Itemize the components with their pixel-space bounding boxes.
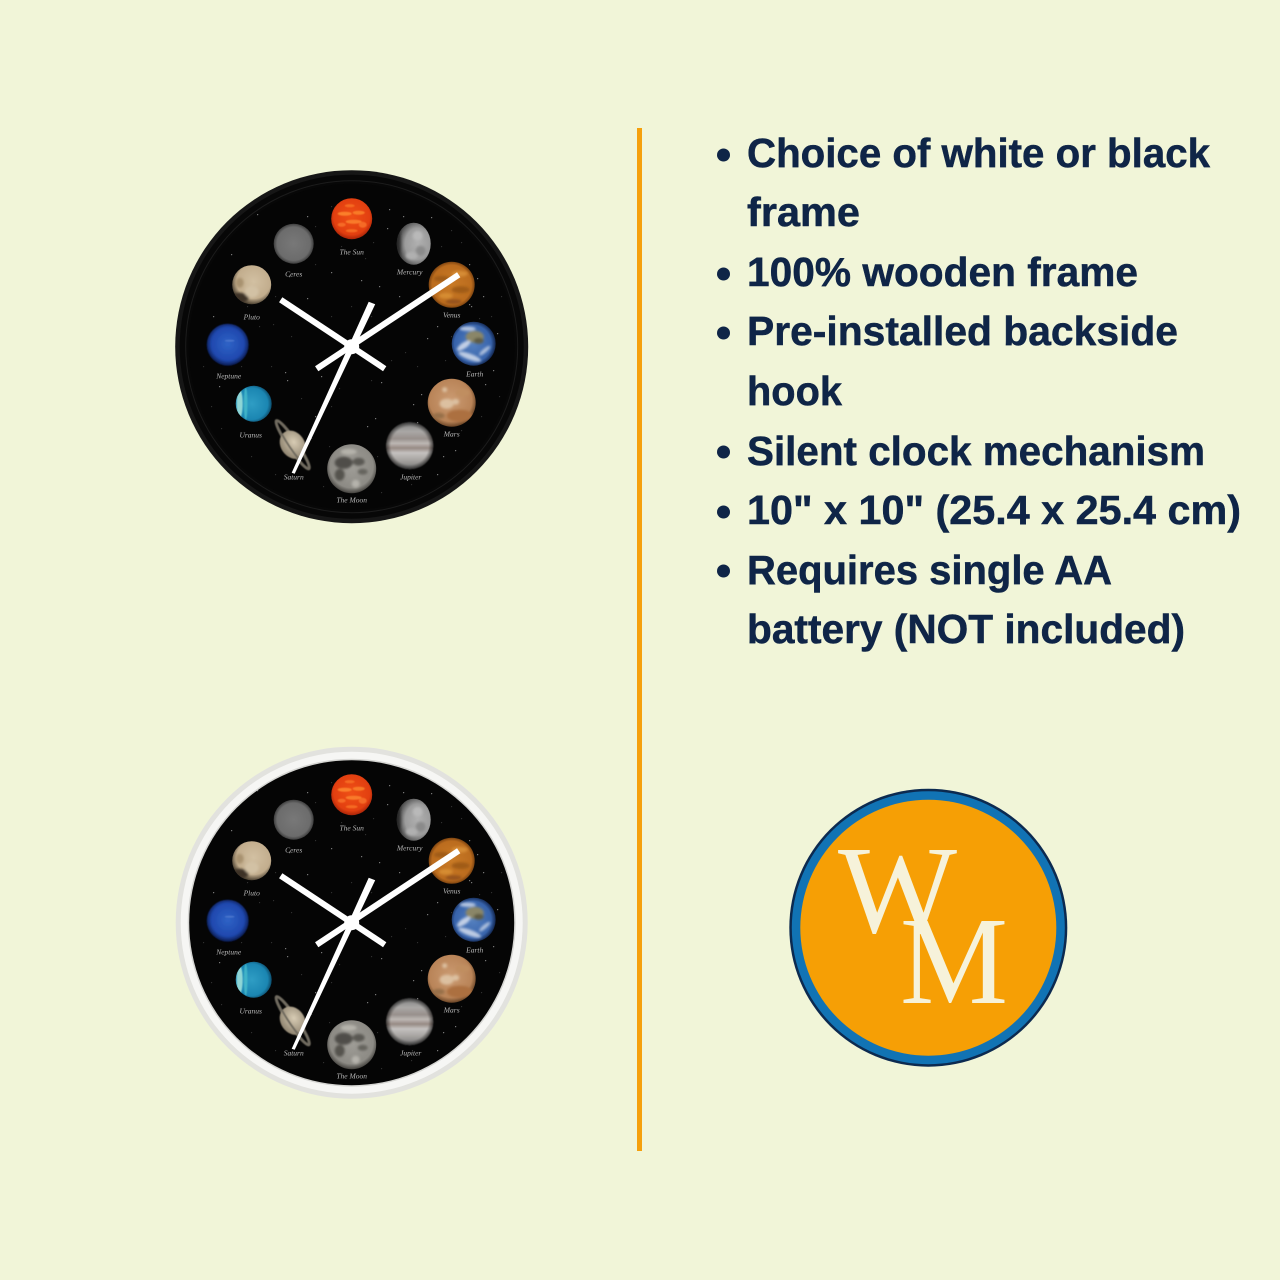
clock: white frame (176, 747, 528, 1099)
planet: The Sun (331, 774, 372, 833)
bullet: choice of frame: Choice of white or black (747, 130, 1210, 176)
planet: The Moon (327, 1020, 376, 1081)
planet: Mars: Mars (443, 1006, 460, 1015)
planet: Earth (452, 898, 496, 955)
bullet: hook (717, 308, 1178, 414)
vertical divider (637, 128, 642, 1151)
planet: The Moon: The Moon (336, 1072, 367, 1081)
planet: Ceres (274, 800, 314, 855)
planet: Earth: Earth (465, 370, 483, 379)
logo: WM monogram: W (838, 822, 957, 960)
bullet: battery: Requires single AA (747, 547, 1112, 593)
planet: The Moon: The Moon (336, 496, 367, 505)
clock: black frame (175, 170, 528, 523)
planet: The Sun: The Sun (340, 824, 364, 833)
planet: Jupiter (386, 422, 433, 482)
planet: Jupiter: Jupiter (400, 473, 421, 482)
planet: Uranus (236, 386, 272, 440)
planet: Neptune (207, 324, 249, 381)
planet: Mercury (393, 222, 431, 277)
logo: WM monogram (789, 789, 1067, 1067)
clock hands (281, 275, 459, 474)
clock hands (281, 851, 459, 1050)
bullet: battery: battery (NOT included) (747, 606, 1185, 652)
planet: Saturn: Saturn (284, 473, 304, 482)
planet: Venus: Venus (443, 311, 461, 320)
planet: Neptune (207, 900, 249, 957)
planet: Venus (429, 838, 475, 896)
planet: Ceres: Ceres (285, 846, 302, 855)
bullet: wooden frame: 100% wooden frame (747, 249, 1138, 295)
planet: Uranus: Uranus (239, 1007, 262, 1016)
planet: Earth (452, 322, 496, 379)
bullet: choice of frame: frame (747, 189, 860, 235)
bullet: battery (717, 547, 1185, 652)
planet: Neptune: Neptune (215, 372, 242, 381)
bullet: size: 10" x 10" (25.4 x 25.4 cm) (747, 487, 1241, 533)
planet: Pluto: Pluto (243, 313, 260, 322)
planet: The Sun: The Sun (340, 248, 364, 257)
bullet: hook: hook (747, 368, 842, 414)
planet: Earth: Earth (465, 946, 483, 955)
planet: Venus (429, 262, 475, 320)
planet: Uranus (236, 962, 272, 1016)
planet: Pluto (231, 265, 271, 322)
planet: Uranus: Uranus (239, 431, 262, 440)
planet: Saturn: Saturn (284, 1049, 304, 1058)
clock face (189, 760, 514, 1085)
planet: Saturn (273, 994, 313, 1058)
clock face (189, 184, 515, 510)
planet: Mercury: Mercury (396, 844, 423, 853)
planet: The Sun (331, 198, 372, 257)
planet: Neptune: Neptune (215, 948, 242, 957)
planet: Jupiter (386, 998, 433, 1058)
clock frame: black (175, 170, 528, 523)
planet: The Moon (327, 444, 376, 505)
planet: Mars: Mars (443, 430, 460, 439)
planet: Venus: Venus (443, 887, 461, 896)
planet: Mercury (393, 798, 431, 853)
clock frame: white (176, 747, 528, 1099)
planet: Pluto (231, 841, 271, 898)
planet: Saturn (273, 418, 313, 482)
planet: Pluto: Pluto (243, 889, 260, 898)
planet: Jupiter: Jupiter (400, 1049, 421, 1058)
bullet: hook: Pre-installed backside (747, 308, 1178, 354)
planet: Ceres (274, 224, 314, 279)
planet: Mars (428, 955, 476, 1015)
planet: Mercury: Mercury (396, 268, 423, 277)
planet: Ceres: Ceres (285, 270, 302, 279)
bullet: silent mechanism: Silent clock mechanism (747, 428, 1205, 474)
feature list (717, 130, 1241, 652)
bullet: choice of frame (717, 130, 1210, 235)
planet: Mars (428, 379, 476, 439)
logo: WM monogram: M (900, 893, 1008, 1031)
